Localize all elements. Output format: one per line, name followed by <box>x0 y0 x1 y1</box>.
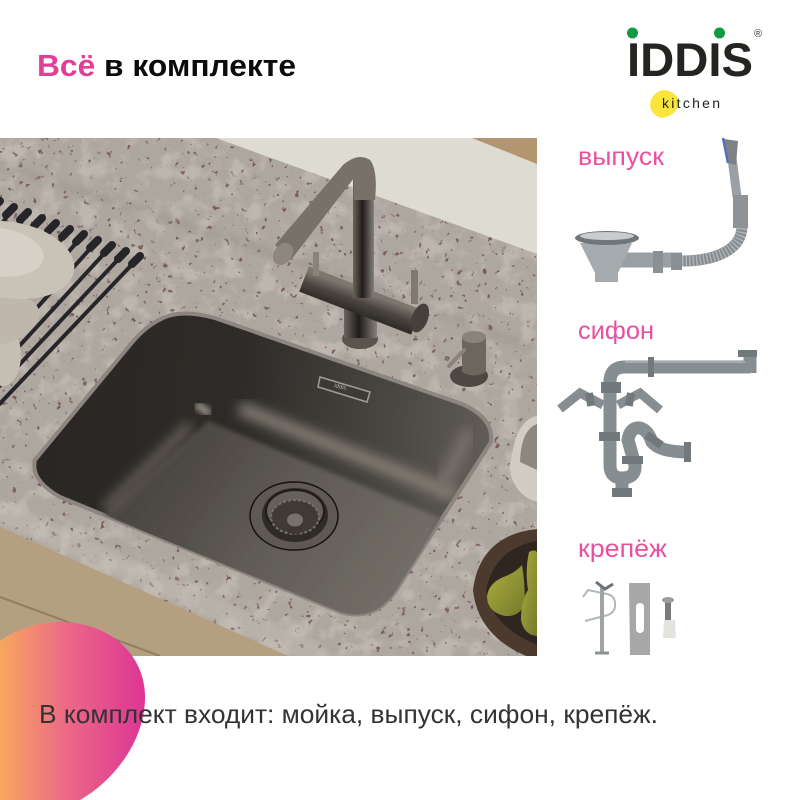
clamp <box>583 582 615 653</box>
countertop <box>0 138 537 656</box>
overflow plate: iddis <box>334 383 347 392</box>
logo dot left <box>627 28 638 38</box>
title: Всё в комплекте <box>37 48 296 83</box>
product: siphon <box>560 350 757 497</box>
overflow plate <box>318 377 370 402</box>
caption: В комплект входит: мойка, выпуск, сифон, крепёж. <box>39 699 658 729</box>
logo: IDDIS kitchen <box>627 28 762 118</box>
faucet <box>269 157 433 349</box>
label: крепёж: крепёж <box>578 535 667 563</box>
logo dot right <box>714 28 725 38</box>
label: сифон: сифон <box>578 317 654 345</box>
wooden bowl with pears <box>473 529 537 660</box>
photo: sink on granite countertop <box>0 138 537 660</box>
product: mounting hardware <box>583 582 676 655</box>
lower cabinet <box>0 527 288 656</box>
yellow spot <box>650 90 679 118</box>
drain <box>250 482 338 550</box>
registered mark: ® <box>754 28 762 40</box>
label: выпуск: выпуск <box>578 143 665 171</box>
product: drain outlet <box>575 138 748 282</box>
gradient circle accent <box>0 622 145 800</box>
screw <box>662 597 676 638</box>
soap dispenser <box>449 331 488 387</box>
ceramic cup <box>510 416 537 502</box>
plates <box>0 221 74 386</box>
plate <box>629 583 650 655</box>
wall <box>216 138 537 254</box>
upper cabinet <box>472 138 537 164</box>
logo wordmark: IDDIS <box>627 33 753 86</box>
sink floor <box>104 421 440 630</box>
sink bowl <box>34 314 491 630</box>
drying mat <box>0 201 140 414</box>
kitchen wordmark: kitchen <box>662 95 720 111</box>
